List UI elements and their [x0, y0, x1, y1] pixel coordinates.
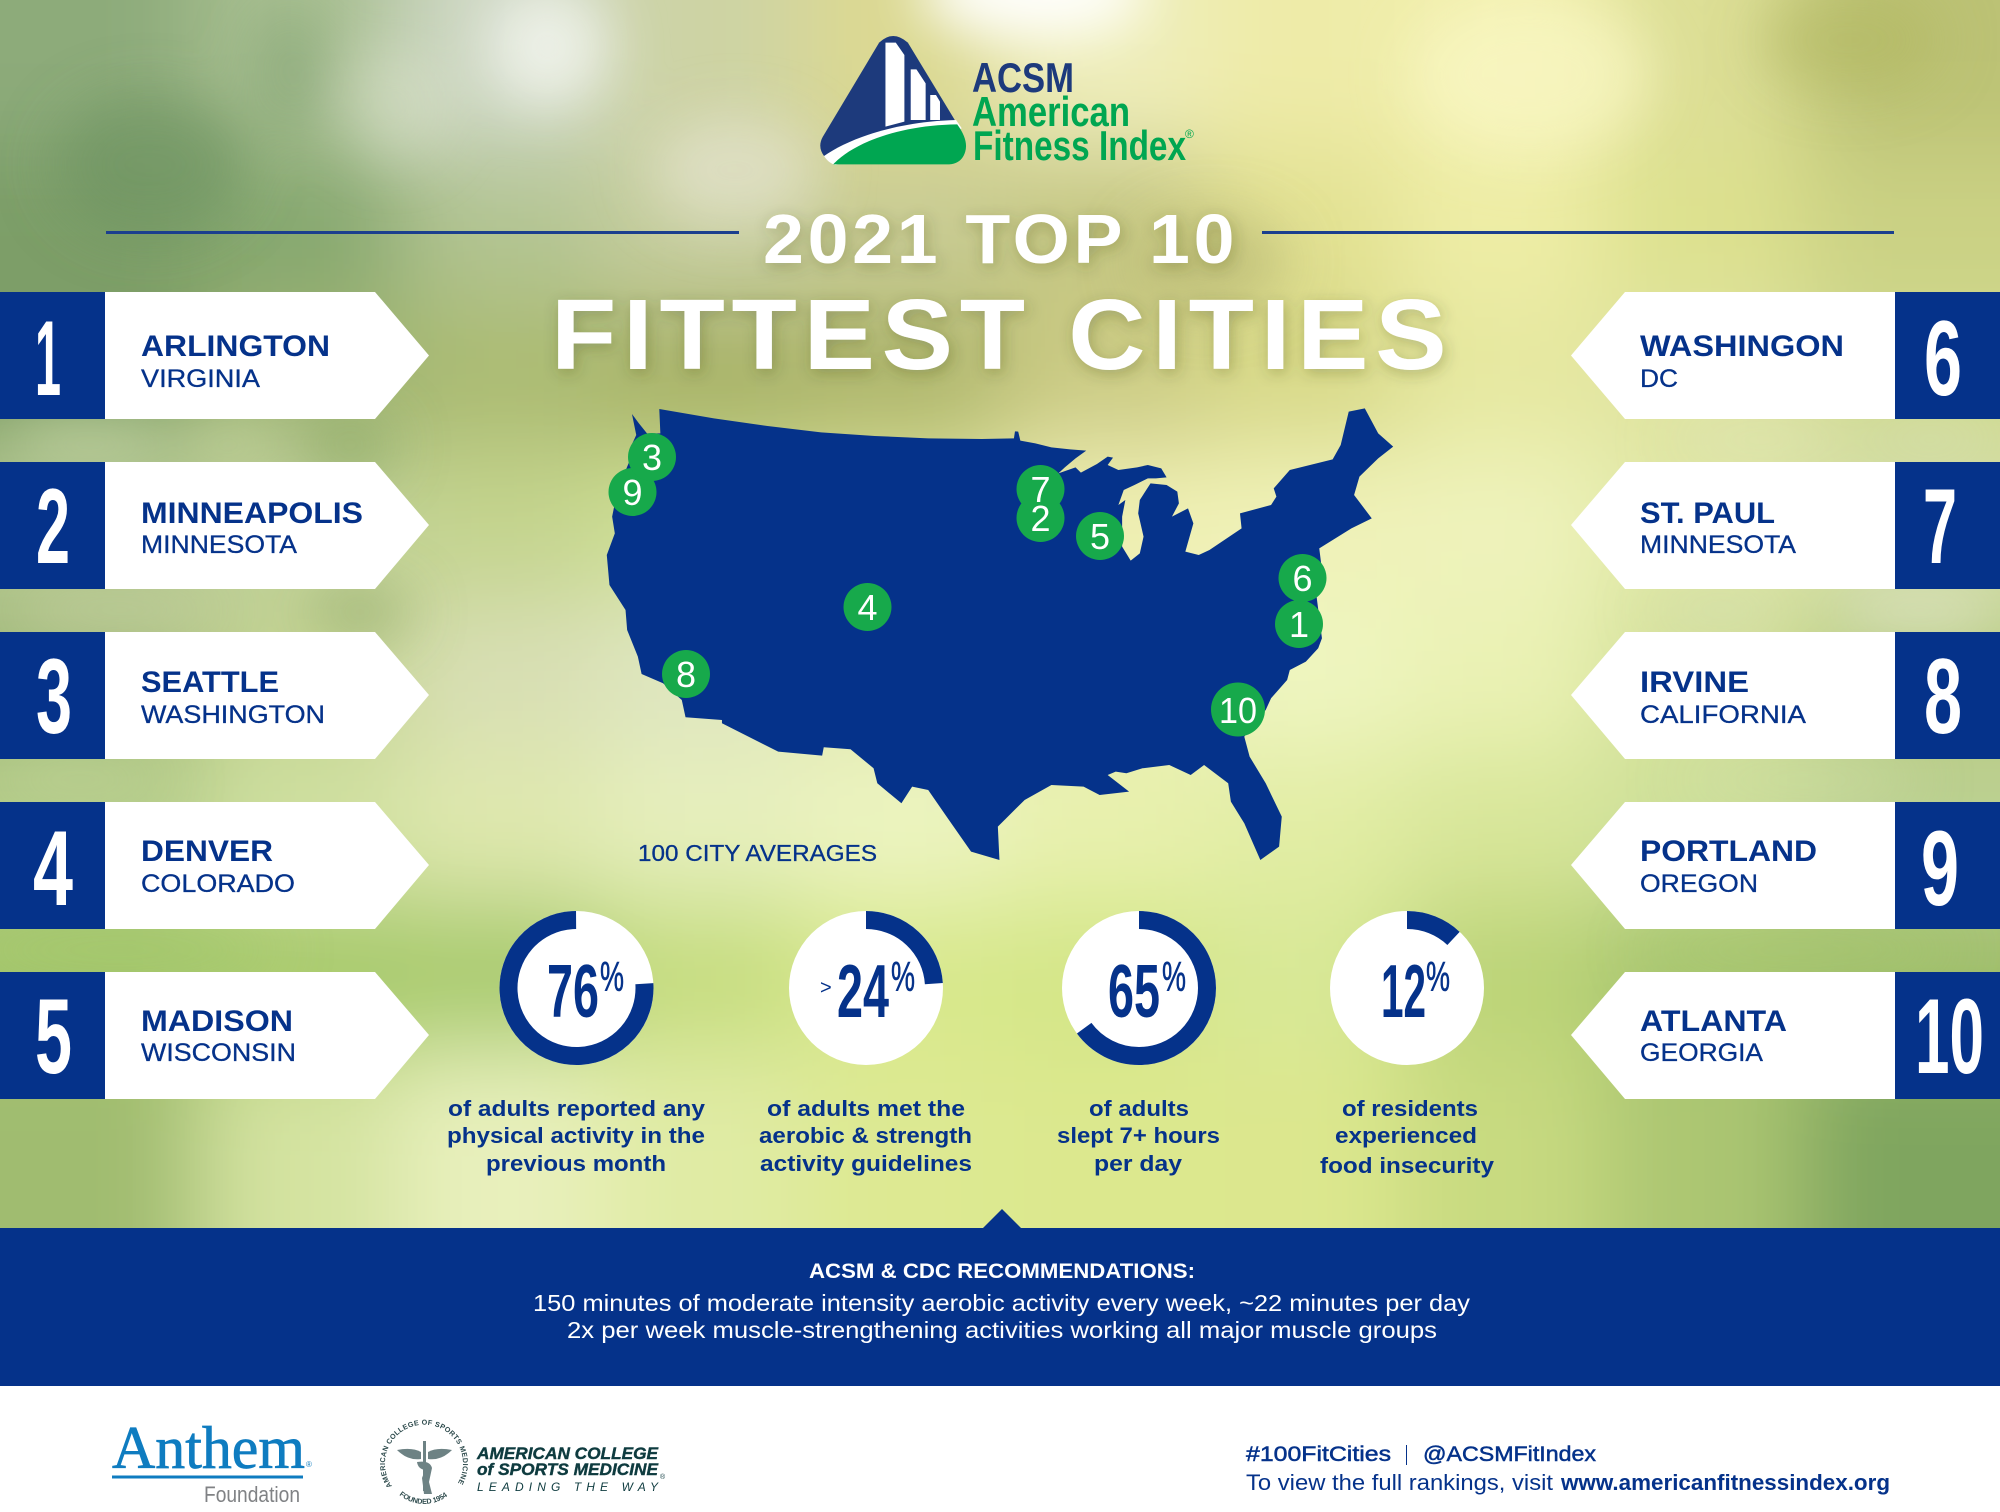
stat: 76 percent physical activity: previous month — [486, 1151, 666, 1176]
panel: rank 7 St. Paul: ST. PAUL — [1640, 497, 1775, 530]
panel: rank 10 Atlanta: GEORGIA — [1640, 1039, 1763, 1067]
footer panel — [0, 1386, 2000, 1512]
marker 4: 4 — [857, 587, 878, 628]
icon: winged staff and figure — [397, 1441, 452, 1494]
marker 5 — [1076, 512, 1124, 560]
markers 3 and 9 — [608, 433, 676, 516]
stat: 12 percent food insecurity: 12 — [1381, 949, 1426, 1033]
panel: rank 6 Washington DC: WASHINGON — [1640, 330, 1844, 363]
panel: rank 6 Washington DC — [1571, 292, 2000, 419]
panel: rank 4 Denver: 4 — [33, 808, 73, 928]
marker 10: 10 — [1219, 690, 1257, 731]
panel: rank 4 Denver: COLORADO — [141, 870, 295, 898]
panel: rank 8 Irvine: CALIFORNIA — [1640, 701, 1806, 729]
markers 7 and 2: 7 — [1030, 469, 1051, 510]
panel: rank 1 Arlington — [0, 292, 429, 419]
stat: 76 percent physical activity: of adults reported any — [448, 1096, 706, 1121]
markers 3 and 9: 3 — [642, 437, 662, 478]
logo text: ACSM wordmark: AMERICAN COLLEGE — [476, 1445, 659, 1463]
panel: rank 9 Portland: OREGON — [1640, 870, 1758, 898]
stat: 65 percent slept 7+ hours — [1057, 911, 1220, 1176]
panel: recommendations band — [0, 1209, 2000, 1386]
band heading: ACSM & CDC RECOMMENDATIONS: — [809, 1259, 1195, 1283]
panel: rank 2 Minneapolis: 2 — [36, 466, 70, 586]
panel: rank 9 Portland — [1571, 802, 2000, 929]
panel: rank 1 Arlington: VIRGINIA — [141, 365, 260, 393]
logo text: ACSM wordmark: LEADING THE WAY — [477, 1480, 659, 1494]
stat: 65 percent slept 7+ hours: % — [1162, 953, 1186, 1000]
marker 8 — [662, 650, 710, 698]
panel: rank 1 Arlington: ARLINGTON — [141, 330, 330, 363]
heading: 100 city averages: 100 CITY AVERAGES — [638, 840, 877, 866]
marker 10 — [1211, 682, 1265, 736]
stat: 12 percent food insecurity: experienced — [1335, 1123, 1477, 1148]
stat: 24 percent met guidelines — [759, 911, 972, 1176]
panel: rank 10 Atlanta — [1571, 972, 2000, 1099]
logo: Anthem Foundation: ® — [306, 1460, 312, 1469]
panel: rank 8 Irvine — [1571, 632, 2000, 759]
stat: 65 percent slept 7+ hours: of adults — [1089, 1096, 1189, 1121]
title: Fittest Cities: FITTEST CITIES — [551, 278, 1447, 390]
logo: Anthem Foundation: Anthem — [112, 1415, 305, 1481]
stat: 24 percent met guidelines: % — [891, 953, 915, 1000]
panel: rank 5 Madison: WISCONSIN — [141, 1039, 296, 1067]
logo text: ACSM wordmark: ® — [660, 1473, 666, 1481]
panel: rank 8 Irvine: IRVINE — [1640, 666, 1749, 699]
panel: rank 10 Atlanta: ATLANTA — [1640, 1005, 1787, 1038]
title: 2021 Top 10: 2021 TOP 10 — [763, 201, 1234, 279]
panel: rank 4 Denver — [0, 802, 429, 929]
band line 1: 150 minutes of moderate intensity aerobic activity every week, ~22 minutes per day — [533, 1290, 1471, 1316]
logo text: ACSM wordmark — [476, 1445, 666, 1494]
logo: American College of Sports Medicine seal: AMERICAN COLLEGE OF SPORTS MEDICINE — [380, 1420, 468, 1487]
panel: rank 9 Portland: 9 — [1921, 808, 1959, 928]
markers 3 and 9: 9 — [622, 472, 643, 513]
stat: 76 percent physical activity: physical activity in the — [447, 1123, 705, 1148]
marker 4 — [844, 583, 892, 631]
stat: 12 percent food insecurity — [1320, 911, 1495, 1178]
panel: rank 4 Denver: DENVER — [141, 835, 273, 868]
marker 5: 5 — [1090, 516, 1110, 557]
footer website line: To view the full rankings, visit — [1246, 1470, 1553, 1495]
panel: rank 7 St. Paul: 7 — [1923, 466, 1957, 586]
markers 7 and 2 — [1016, 465, 1064, 542]
panel: rank 5 Madison: 5 — [35, 976, 72, 1096]
stat: 24 percent met guidelines: aerobic & strength — [759, 1123, 972, 1148]
divider line left — [106, 231, 739, 234]
stat: 12 percent food insecurity: % — [1426, 953, 1450, 1000]
footer website line: www.americanfitnessindex.org — [1560, 1470, 1890, 1495]
panel: rank 3 Seattle: SEATTLE — [141, 666, 279, 699]
logo: Anthem Foundation: Foundation — [204, 1482, 300, 1507]
panel: rank 5 Madison — [0, 972, 429, 1099]
markers 7 and 2: 2 — [1030, 498, 1051, 539]
stat: 76 percent physical activity: 76 — [547, 949, 599, 1033]
panel: rank 3 Seattle — [0, 632, 429, 759]
marker 8: 8 — [676, 654, 696, 695]
panel: rank 3 Seattle: WASHINGTON — [141, 701, 325, 729]
footer website line — [1246, 1470, 1890, 1495]
panel: rank 1 Arlington: 1 — [35, 298, 61, 418]
panel: rank 9 Portland: PORTLAND — [1640, 835, 1817, 868]
logo: American College of Sports Medicine seal: FOUNDED 1954 — [400, 1491, 447, 1504]
stat: 12 percent food insecurity: food insecurity — [1320, 1153, 1495, 1178]
footer social line: #100FitCities — [1246, 1443, 1391, 1466]
panel: rank 7 St. Paul: MINNESOTA — [1640, 531, 1796, 559]
logo text: ACSM: ACSM — [972, 54, 1074, 101]
stat: 24 percent met guidelines: > — [820, 977, 832, 999]
panel: rank 2 Minneapolis: MINNESOTA — [141, 531, 297, 559]
band line 2: 2x per week muscle-strengthening activities working all major muscle groups — [567, 1317, 1437, 1343]
panel: rank 8 Irvine: 8 — [1924, 636, 1962, 756]
stat: 24 percent met guidelines: activity guidelines — [760, 1151, 972, 1176]
markers 6 and 1 — [1275, 554, 1326, 648]
stat: 12 percent food insecurity: of residents — [1342, 1096, 1478, 1121]
stat: 65 percent slept 7+ hours: slept 7+ hours — [1057, 1123, 1220, 1148]
logo mark: registered: ® — [1185, 127, 1194, 141]
logo text: Fitness Index: Fitness Index — [973, 122, 1187, 169]
panel: rank 7 St. Paul — [1571, 462, 2000, 589]
footer social line — [1246, 1443, 1597, 1466]
panel: rank 3 Seattle: 3 — [36, 636, 72, 756]
panel: rank 2 Minneapolis — [0, 462, 429, 589]
panel: rank 6 Washington DC: DC — [1640, 365, 1678, 393]
stat: 76 percent physical activity — [447, 911, 706, 1176]
logo: ACSM American Fitness Index — [820, 36, 1194, 169]
logo text: ACSM wordmark: of SPORTS MEDICINE — [477, 1461, 659, 1479]
stat: 65 percent slept 7+ hours: per day — [1094, 1151, 1183, 1176]
divider line right — [1262, 231, 1894, 234]
stat: 24 percent met guidelines: of adults met the — [767, 1096, 965, 1121]
icon: mountain and city skyline — [820, 36, 966, 165]
map: United States with ranked city markers — [607, 408, 1393, 860]
footer social line: @ACSMFitIndex — [1423, 1443, 1597, 1466]
markers 6 and 1: 1 — [1289, 604, 1309, 645]
map shape — [607, 408, 1393, 860]
logo text: American: American — [972, 88, 1130, 135]
stat: 76 percent physical activity: % — [600, 953, 624, 1000]
panel: rank 6 Washington DC: 6 — [1924, 298, 1962, 418]
panel: rank 5 Madison: MADISON — [141, 1005, 293, 1038]
panel: rank 2 Minneapolis: MINNEAPOLIS — [141, 497, 363, 530]
stat: 65 percent slept 7+ hours: 65 — [1108, 949, 1160, 1033]
markers 6 and 1: 6 — [1292, 558, 1313, 599]
stat: 24 percent met guidelines: 24 — [837, 949, 889, 1033]
logo: Anthem Foundation — [112, 1415, 312, 1507]
